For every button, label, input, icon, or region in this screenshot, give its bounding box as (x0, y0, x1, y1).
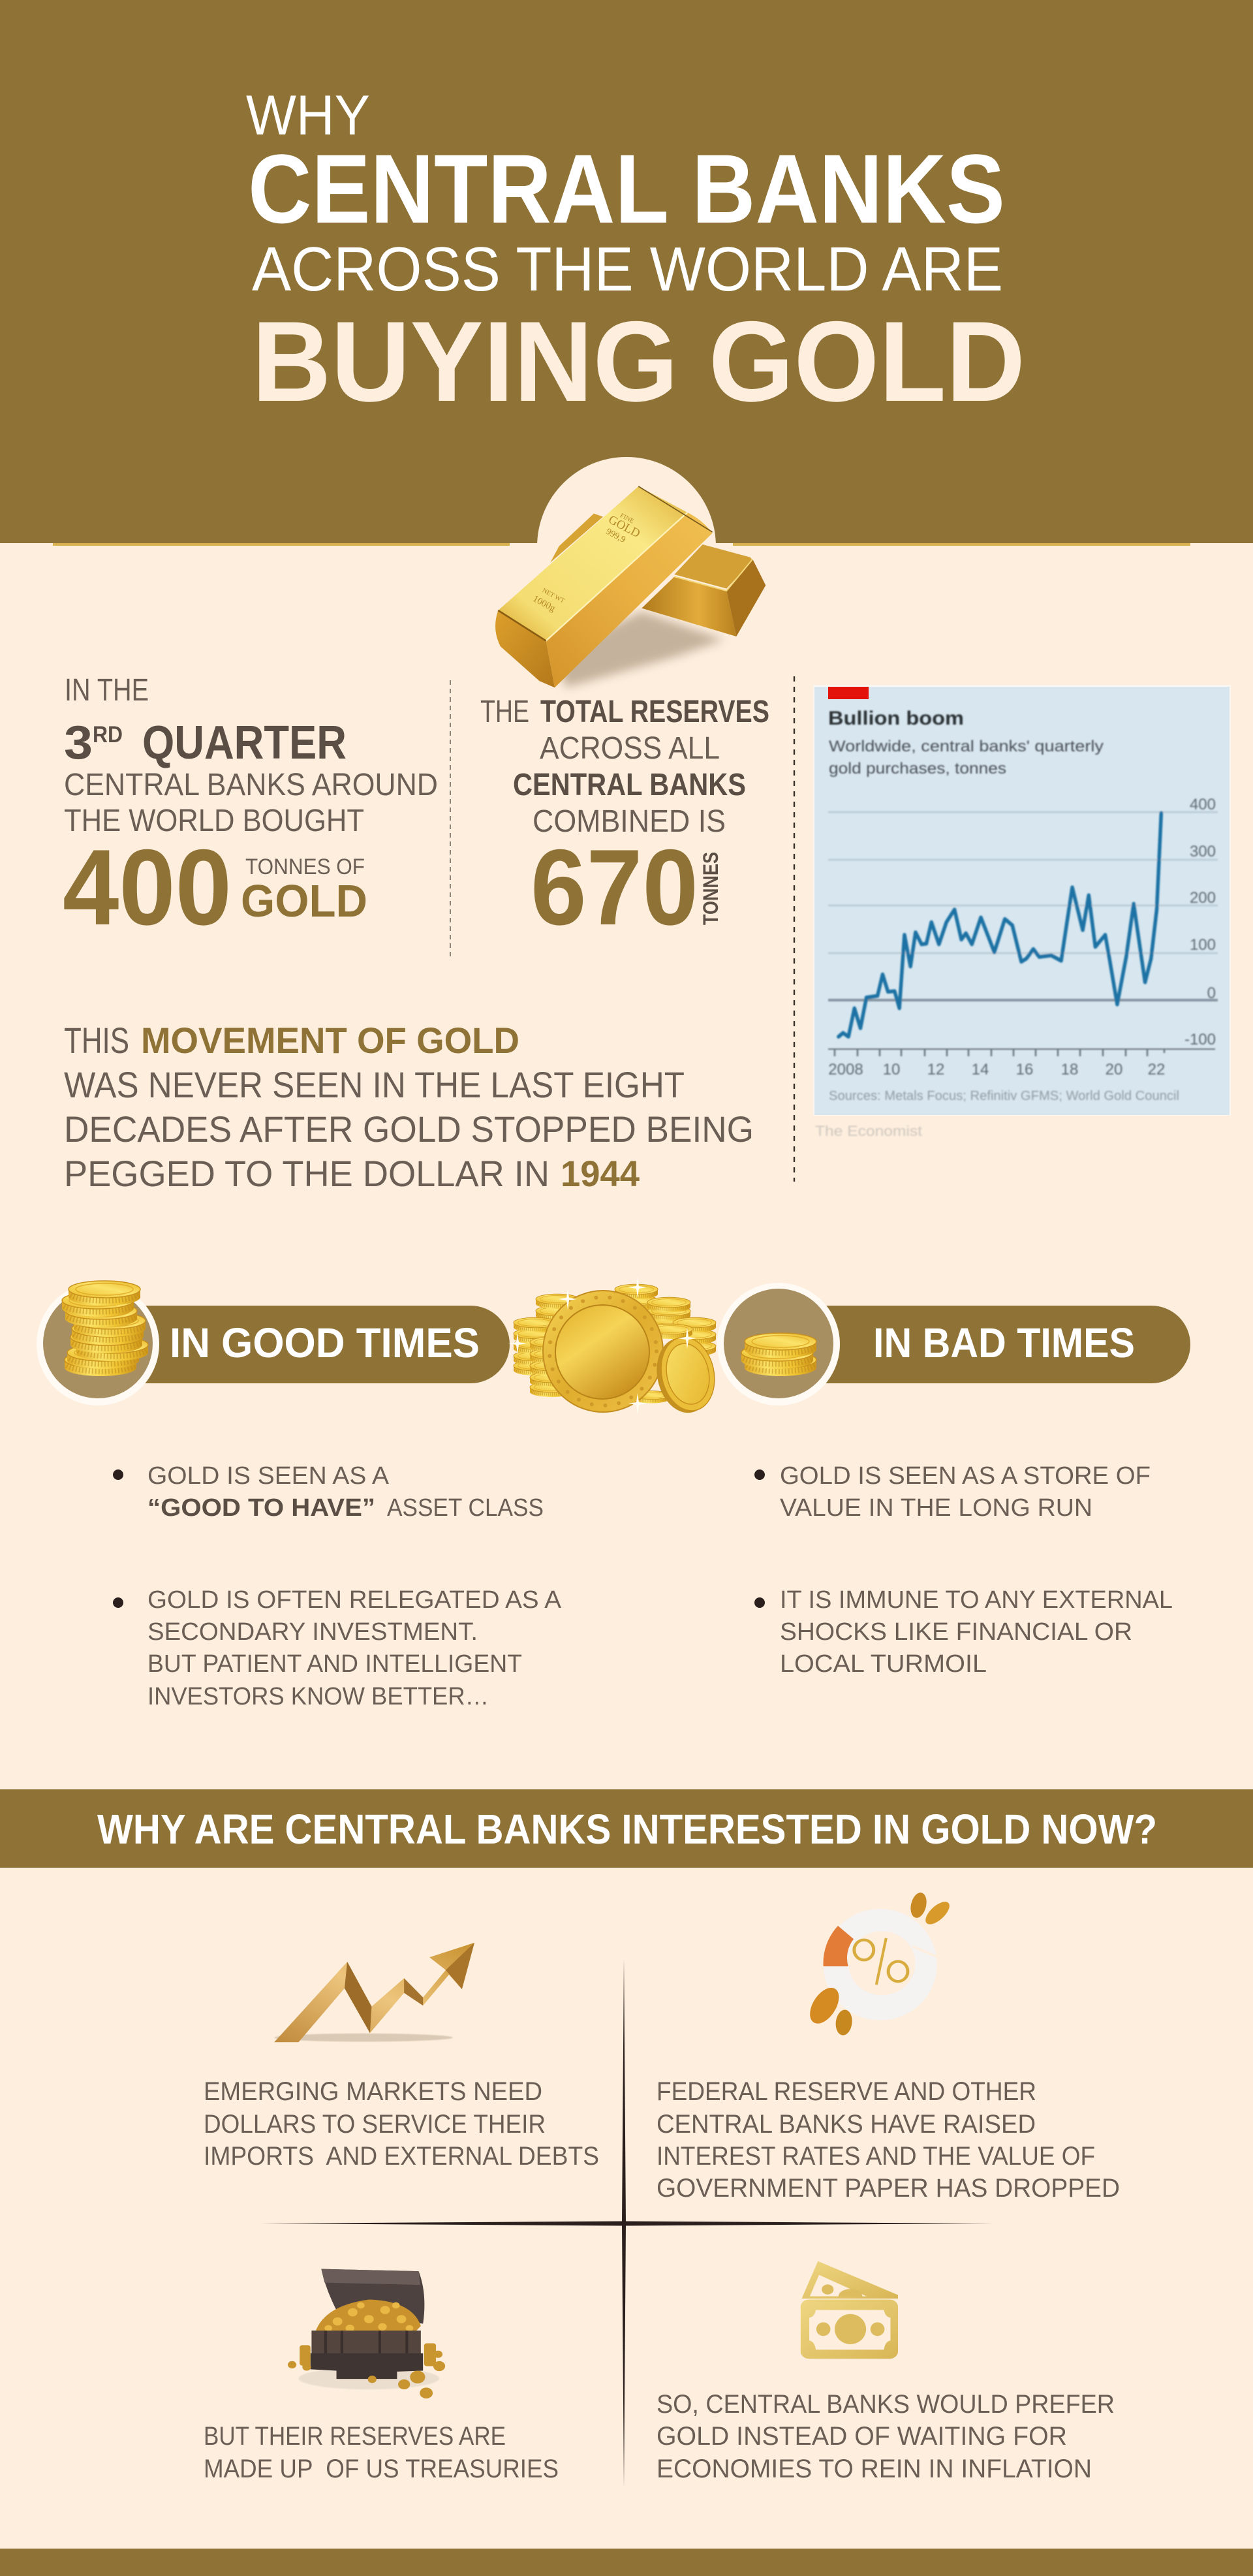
chart: Bullion boom: gold purchases, tonnes (829, 760, 1006, 778)
banner: in good times (37, 1283, 510, 1406)
icon: gold bars (495, 486, 766, 687)
text: emerging markets: EMERGING MARKETS NEED (204, 2077, 542, 2106)
title: WHY (246, 84, 370, 147)
text: prefer gold: GOLD INSTEAD OF WAITING FOR (657, 2422, 1067, 2451)
text: federal reserve: FEDERAL RESERVE AND OTHER (657, 2077, 1036, 2106)
title: BUYING GOLD (252, 298, 1025, 426)
panel: total reserves: 670 (531, 827, 698, 947)
list: bad times: SHOCKS LIKE FINANCIAL OR (780, 1618, 1132, 1646)
chart: Bullion boom: 16 (1016, 1061, 1033, 1078)
banner: in good times: IN GOOD TIMES (170, 1319, 480, 1366)
panel: 3rd quarter purchases: GOLD (241, 875, 367, 926)
banner: in bad times (717, 1283, 1190, 1406)
panel: total reserves: ACROSS ALL (540, 731, 720, 766)
paragraph: movement of gold: 1944 (561, 1153, 640, 1194)
panel: total reserves (480, 695, 769, 947)
title: ACROSS THE WORLD ARE (252, 234, 1003, 304)
panel: total reserves: CENTRAL BANKS (513, 768, 746, 802)
chart: Bullion boom: 14 (972, 1061, 989, 1078)
list: good times: GOLD IS OFTEN RELEGATED AS A (147, 1586, 562, 1614)
panel: total reserves: TOTAL RESERVES (540, 695, 769, 729)
chart: Bullion boom: -100 (1184, 1031, 1216, 1048)
panel: 3rd quarter purchases: THE WORLD BOUGHT (64, 804, 364, 838)
text: reserves: BUT THEIR RESERVES ARE (204, 2422, 506, 2451)
panel: total reserves: THE (480, 695, 529, 729)
icon: gold bars: 999,9 (604, 527, 627, 545)
chart: Bullion boom: Sources: Metals Focus; Refinitiv GFMS; World Gold Council (829, 1089, 1179, 1103)
list: good times: INVESTORS KNOW BETTER… (147, 1683, 489, 1710)
list: bad times (754, 1462, 1173, 1678)
icon: interest rate percent (804, 1892, 953, 2036)
list: good times: GOLD IS SEEN AS A (147, 1462, 390, 1490)
panel: 3rd quarter purchases: CENTRAL BANKS AROUND (64, 768, 438, 802)
chart: Bullion boom: 200 (1190, 889, 1216, 907)
chart: Bullion boom: 300 (1190, 843, 1216, 860)
panel: 3rd quarter purchases: RD (93, 722, 123, 747)
chart: Bullion boom: Worldwide, central banks' quarterly (829, 738, 1104, 755)
chart: Bullion boom: 18 (1061, 1061, 1078, 1078)
quadrant cross lines (261, 1958, 993, 2488)
list: good times: BUT PATIENT AND INTELLIGENT (147, 1650, 522, 1678)
panel: 3rd quarter purchases: IN THE (65, 673, 149, 708)
list: bad times: IT IS IMMUNE TO ANY EXTERNAL (780, 1586, 1173, 1614)
panel: total reserves: TONNES (699, 852, 722, 925)
list: bad times: VALUE IN THE LONG RUN (780, 1494, 1092, 1522)
footer band (0, 2549, 1253, 2576)
icon: money notes (801, 2261, 898, 2359)
icon: gold bars: NET WT (541, 587, 566, 605)
chart: Bullion boom: 10 (883, 1061, 900, 1078)
chart: Bullion boom: 0 (1207, 984, 1216, 1002)
title: CENTRAL BANKS (248, 134, 1005, 243)
text: prefer gold: ECONOMIES TO REIN IN INFLATION (657, 2455, 1092, 2483)
paragraph: movement of gold: MOVEMENT OF GOLD (141, 1020, 519, 1061)
icon: gold bars: GOLD (606, 512, 642, 541)
banner: in bad times: IN BAD TIMES (873, 1319, 1135, 1366)
icon: short coin stack (741, 1333, 816, 1376)
header band (0, 0, 1253, 636)
panel: 3rd quarter purchases (63, 673, 438, 947)
list: bad times: GOLD IS SEEN AS A STORE OF (780, 1462, 1151, 1490)
section heading band (0, 1789, 1253, 1868)
chart: Bullion boom: 100 (1190, 936, 1216, 954)
title (246, 84, 1025, 426)
panel: 3rd quarter purchases: QUARTER (142, 717, 347, 769)
chart: Bullion boom (813, 685, 1231, 1139)
gold divider lines (53, 543, 1190, 546)
chart: Bullion boom: Bullion boom (828, 708, 964, 729)
chart: Bullion boom: 22 (1148, 1061, 1165, 1078)
text: prefer gold (657, 2390, 1115, 2483)
chart: Bullion boom: 20 (1106, 1061, 1122, 1078)
paragraph: movement of gold (64, 1020, 754, 1194)
list: bad times: LOCAL TURMOIL (780, 1650, 987, 1678)
text: prefer gold: SO, CENTRAL BANKS WOULD PREFER (657, 2390, 1115, 2419)
chart: Bullion boom: 400 (1190, 796, 1216, 813)
text: reserves (204, 2422, 559, 2483)
panel: 3rd quarter purchases: 3 (64, 717, 93, 769)
icon: tall coin stack (62, 1281, 148, 1376)
icon: central coin pile (508, 1277, 721, 1418)
panel: 3rd quarter purchases: TONNES OF (245, 855, 365, 879)
paragraph: movement of gold: DECADES AFTER GOLD STOPPED BEING (64, 1108, 754, 1150)
icon: rising arrow (274, 1943, 474, 2042)
paragraph: movement of gold: PEGGED TO THE DOLLAR IN (64, 1153, 549, 1194)
icon: gold bars: 1000g (531, 593, 557, 614)
text: emerging markets: IMPORTS AND EXTERNAL DEBTS (204, 2142, 599, 2171)
chart: Bullion boom: 12 (927, 1061, 944, 1078)
list: good times: ASSET CLASS (387, 1494, 544, 1522)
list: good times: “GOOD TO HAVE” (147, 1494, 375, 1522)
text: emerging markets (204, 2077, 599, 2171)
chart: Bullion boom: 2008 (828, 1061, 863, 1078)
section heading band: WHY ARE CENTRAL BANKS INTERESTED IN GOLD NOW? (97, 1806, 1157, 1853)
paragraph: movement of gold: WAS NEVER SEEN IN THE LAST EIGHT (64, 1064, 685, 1105)
chart: Bullion boom: The Economist (815, 1123, 922, 1139)
text: emerging markets: DOLLARS TO SERVICE THEIR (204, 2110, 546, 2139)
text: federal reserve: CENTRAL BANKS HAVE RAISED (657, 2110, 1036, 2139)
text: federal reserve: GOVERNMENT PAPER HAS DROPPED (657, 2174, 1120, 2203)
paragraph: movement of gold: THIS (64, 1020, 129, 1061)
list: good times (113, 1462, 562, 1710)
icon: gold bars: FINE (619, 512, 635, 526)
panel: total reserves: COMBINED IS (533, 804, 726, 839)
panel: 3rd quarter purchases: 400 (63, 827, 232, 947)
text: federal reserve (657, 2077, 1120, 2203)
icon: treasure chest (288, 2269, 445, 2398)
list: good times: SECONDARY INVESTMENT. (147, 1618, 478, 1646)
text: reserves: MADE UP OF US TREASURIES (204, 2455, 559, 2483)
text: federal reserve: INTEREST RATES AND THE VALUE OF (657, 2142, 1095, 2171)
